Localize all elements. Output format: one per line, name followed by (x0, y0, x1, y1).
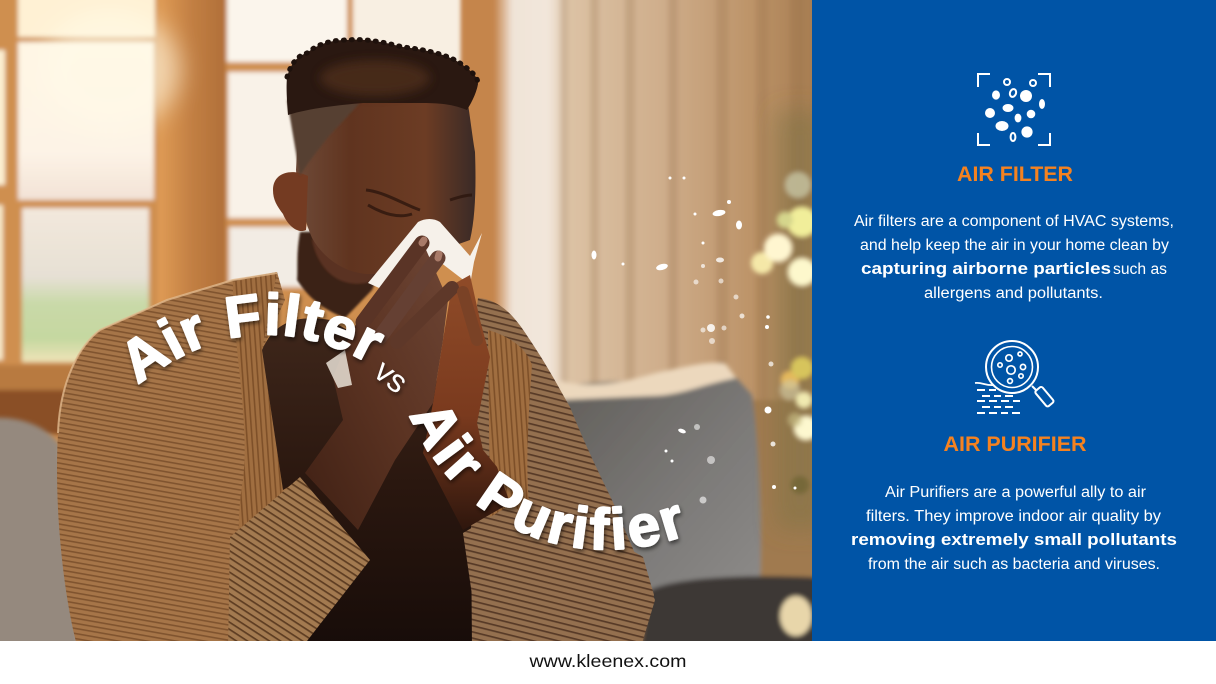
heading: Air Filter curved text: Air Filter (126, 291, 387, 389)
man: left hand and forearm (305, 236, 448, 530)
man: fingers (363, 240, 477, 342)
icon: air filter particles (978, 74, 1050, 145)
window and wall (0, 0, 480, 450)
man: closed eyes (366, 190, 472, 216)
man: right hand and forearm (423, 275, 510, 530)
photo: man sneezing into a tissue (0, 0, 830, 650)
left sleeve cuff (228, 477, 370, 650)
icon: air purifier magnifier (975, 341, 1054, 413)
panel: blue information column (812, 0, 1216, 641)
text block: air filter description: such as (1113, 261, 1167, 278)
text block: air filter description: capturing airborne particles (861, 260, 1111, 278)
heading: air purifier: AIR PURIFIER (944, 432, 1087, 456)
heading: air filter: AIR FILTER (957, 162, 1073, 186)
text block: air purifier description: from the air such as bacteria and viruses. (868, 556, 1160, 573)
man: neck and beard (295, 230, 376, 318)
text block: air purifier description: removing extremely small pollutants (851, 531, 1177, 549)
tissue fragment at wrist (326, 350, 352, 388)
man: hair (287, 40, 478, 176)
text block: air purifier description (851, 484, 1177, 573)
label: vs: vs (368, 352, 415, 400)
man: cardigan (57, 272, 655, 650)
text block: air filter description: Air filters are a component of HVAC systems, (854, 213, 1174, 230)
text block: air filter description (854, 213, 1174, 302)
sofa (0, 362, 830, 650)
text block: air purifier description: Air Purifiers are a powerful ally to air (885, 484, 1146, 501)
curtain (462, 0, 822, 420)
particles in the air (592, 176, 796, 504)
footer: website address: www.kleenex.com (528, 651, 686, 671)
right sleeve cuff (463, 508, 654, 596)
man: face (296, 98, 475, 274)
man: ear (273, 172, 308, 231)
text block: air filter description: and help keep the air in your home clean by (860, 237, 1169, 254)
heading: Air Purifier curved text: Air Purifier (408, 410, 684, 556)
man: shirt (262, 318, 472, 650)
background foliage (748, 106, 812, 531)
text block: air filter description: allergens and pollutants. (924, 285, 1103, 302)
text block: air purifier description: filters. They improve indoor air quality by (866, 508, 1161, 525)
tissue (368, 219, 482, 295)
